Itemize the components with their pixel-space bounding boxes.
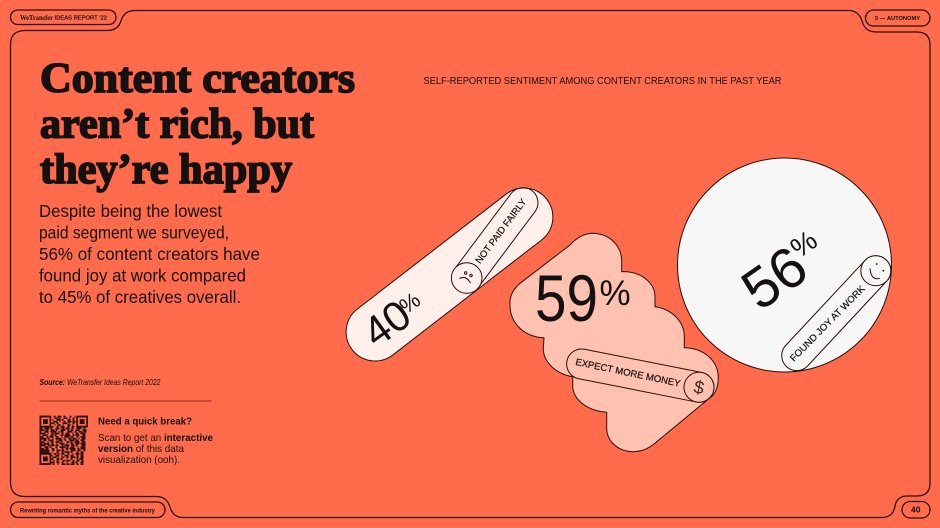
header pill: section <box>866 10 930 26</box>
value: 59%: 59 <box>535 261 598 335</box>
body text <box>39 201 260 307</box>
label pill: found joy at work: FOUND JOY AT WORK <box>788 283 868 364</box>
icon: sad face <box>451 263 482 293</box>
body text: to 45% of creatives overall. <box>39 287 241 307</box>
icon: dollar sign <box>684 372 714 402</box>
stat: 59% expect more money <box>510 233 718 452</box>
title <box>40 56 355 193</box>
chart heading: SELF-REPORTED SENTIMENT AMONG CONTENT CREATORS IN THE PAST YEAR <box>424 75 782 87</box>
value: 56%: 56 <box>730 234 819 323</box>
body text: 56% of content creators have <box>39 244 260 264</box>
value: 40%: % <box>395 287 425 319</box>
title: Content creators <box>40 56 355 102</box>
footer pill: chapter title <box>10 502 165 518</box>
QR callout text: Need a quick break? <box>98 416 192 428</box>
stat: 40% not paid fairly <box>334 176 565 373</box>
label pill: found joy at work <box>776 250 897 377</box>
QR code <box>40 416 88 464</box>
body text: found joy at work compared <box>39 266 246 286</box>
report label: IDEAS REPORT ’22 <box>54 16 107 22</box>
footer pill: page number <box>902 502 930 518</box>
label pill: expect more money <box>564 346 717 405</box>
footer pill: page number: 40 <box>911 506 921 515</box>
header pill: report name <box>10 10 116 24</box>
QR callout text <box>98 416 213 466</box>
icon: smiley face <box>861 256 891 286</box>
value: 40%: 40 <box>354 291 419 356</box>
value: 56%: % <box>785 224 823 264</box>
label pill: not paid fairly <box>446 182 544 299</box>
QR callout text: Scan to get an interactive <box>98 433 213 444</box>
stat: 56% found joy at work <box>678 158 897 377</box>
icon: dollar sign: $ <box>692 377 706 398</box>
QR callout text: version of this data <box>98 444 184 455</box>
QR callout text: visualization (ooh). <box>98 455 180 466</box>
body text: Despite being the lowest <box>39 201 222 221</box>
header pill: section: 5 — AUTONOMY <box>875 16 920 22</box>
source note: Source: WeTransfer Ideas Report 2022 <box>40 378 161 387</box>
label pill: expect more money: EXPECT MORE MONEY <box>574 357 682 390</box>
title: they’re happy <box>40 147 292 193</box>
value: 59%: % <box>600 274 631 313</box>
label pill: not paid fairly: NOT PAID FAIRLY <box>474 196 529 266</box>
logo wordmark: WeTransfer <box>20 15 53 22</box>
footer pill: chapter title: Rewriting romantic myths of the creative industry <box>20 508 156 514</box>
body text: paid segment we surveyed, <box>39 222 229 242</box>
title: aren’t rich, but <box>40 102 314 148</box>
